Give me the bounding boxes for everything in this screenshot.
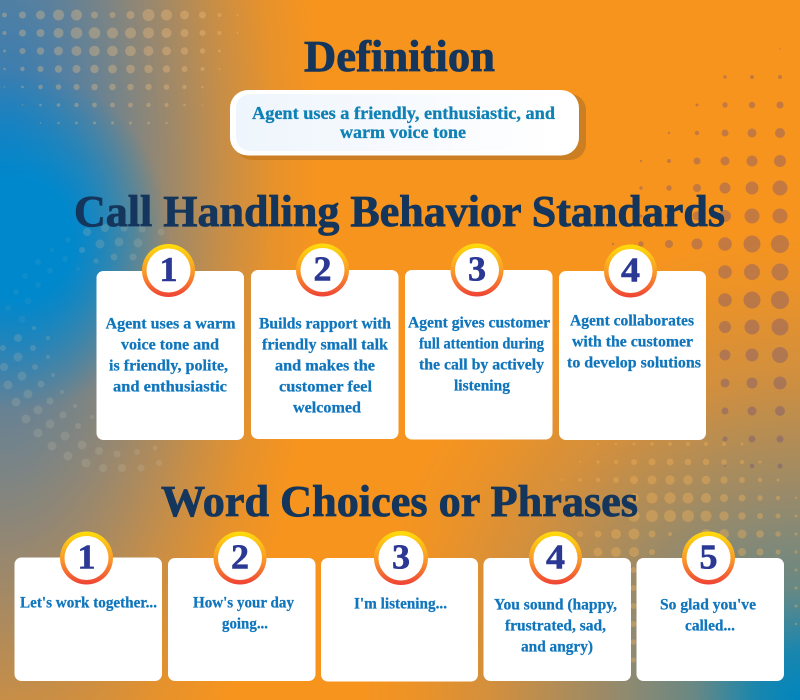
phrase 5 text: called... (685, 618, 735, 635)
number badge 3: 3 (392, 538, 410, 576)
standard 3 text: listening (454, 378, 510, 395)
standard 4 text: Agent collaborates (570, 313, 694, 330)
definition text (252, 103, 555, 142)
number badge 1: 1 (78, 538, 96, 576)
standard 3 text (408, 315, 550, 395)
standard 3 text: full attention during (419, 336, 544, 353)
panel: standard 2 (251, 244, 398, 439)
panel: standard 4 (559, 244, 706, 440)
phrase 1 text: Let's work together... (20, 595, 157, 612)
number badge 2: 2 (314, 250, 332, 288)
definition text: warm voice tone (340, 122, 466, 142)
standard 4 text (567, 313, 701, 372)
number badge 4 (529, 532, 582, 584)
panel: standard 1 (96, 244, 244, 440)
phrase 2 text: How's your day (193, 595, 294, 612)
number badge 1: 1 (160, 250, 178, 289)
standard 2 text (259, 316, 391, 417)
phrase 4 text: You sound (happy, (494, 597, 617, 614)
standard 3 text: the call by actively (419, 357, 544, 374)
number badge 3 (374, 531, 428, 585)
panel: phrase 1 (14, 532, 162, 681)
panel: standard 3 (405, 244, 552, 440)
standard 4 text: with the customer (572, 334, 693, 351)
phrase 5 text: So glad you've (660, 597, 756, 614)
number badge 5 (682, 532, 735, 584)
heading: Word Choices or Phrases: Word Choices or Phrases (161, 477, 638, 526)
number badge 1 (60, 532, 113, 584)
standard 3 text: Agent gives customer (408, 315, 550, 332)
standard 1 text: is friendly, polite, (109, 358, 228, 375)
standard 1 text: Agent uses a warm (106, 316, 236, 333)
phrase 4 text: and angry) (521, 639, 593, 656)
number badge 1 (142, 244, 195, 297)
standard 1 text: voice tone and (121, 337, 219, 354)
panel: phrase 2 (168, 532, 316, 681)
phrase 4 text: frustrated, sad, (505, 618, 606, 635)
panel: definition callout (230, 90, 586, 160)
title: Definition: Definition (304, 32, 495, 81)
definition text: Agent uses a friendly, enthusiastic, and (252, 103, 555, 123)
number badge 4: 4 (546, 538, 565, 576)
number badge 4: 4 (621, 250, 640, 290)
number badge 3: 3 (468, 250, 486, 288)
panel: phrase 3 (321, 531, 478, 682)
number badge 3 (450, 244, 504, 296)
standard 1 text (106, 316, 236, 396)
number badge 4 (604, 244, 657, 298)
standard 2 text: customer feel (279, 379, 373, 396)
number badge 2: 2 (231, 538, 249, 576)
standard 4 text: to develop solutions (567, 355, 701, 372)
panel: phrase 4 (484, 532, 631, 681)
phrase 3 text: I'm listening... (354, 596, 447, 613)
phrase 2 text (193, 595, 294, 633)
number badge 2 (214, 532, 266, 584)
standard 2 text: and makes the (275, 358, 375, 375)
panel: phrase 5 (636, 532, 784, 681)
standard 2 text: friendly small talk (262, 337, 388, 354)
phrase 4 text (494, 597, 617, 656)
number badge 2 (296, 244, 349, 296)
heading: Call Handling Behavior Standards: Call Handling Behavior Standards (74, 187, 725, 236)
number badge 5: 5 (700, 538, 718, 576)
standard 1 text: and enthusiastic (113, 379, 227, 396)
phrase 2 text: going... (222, 616, 268, 633)
standard 2 text: welcomed (293, 400, 361, 417)
standard 2 text: Builds rapport with (259, 316, 391, 333)
phrase 5 text (660, 597, 756, 635)
